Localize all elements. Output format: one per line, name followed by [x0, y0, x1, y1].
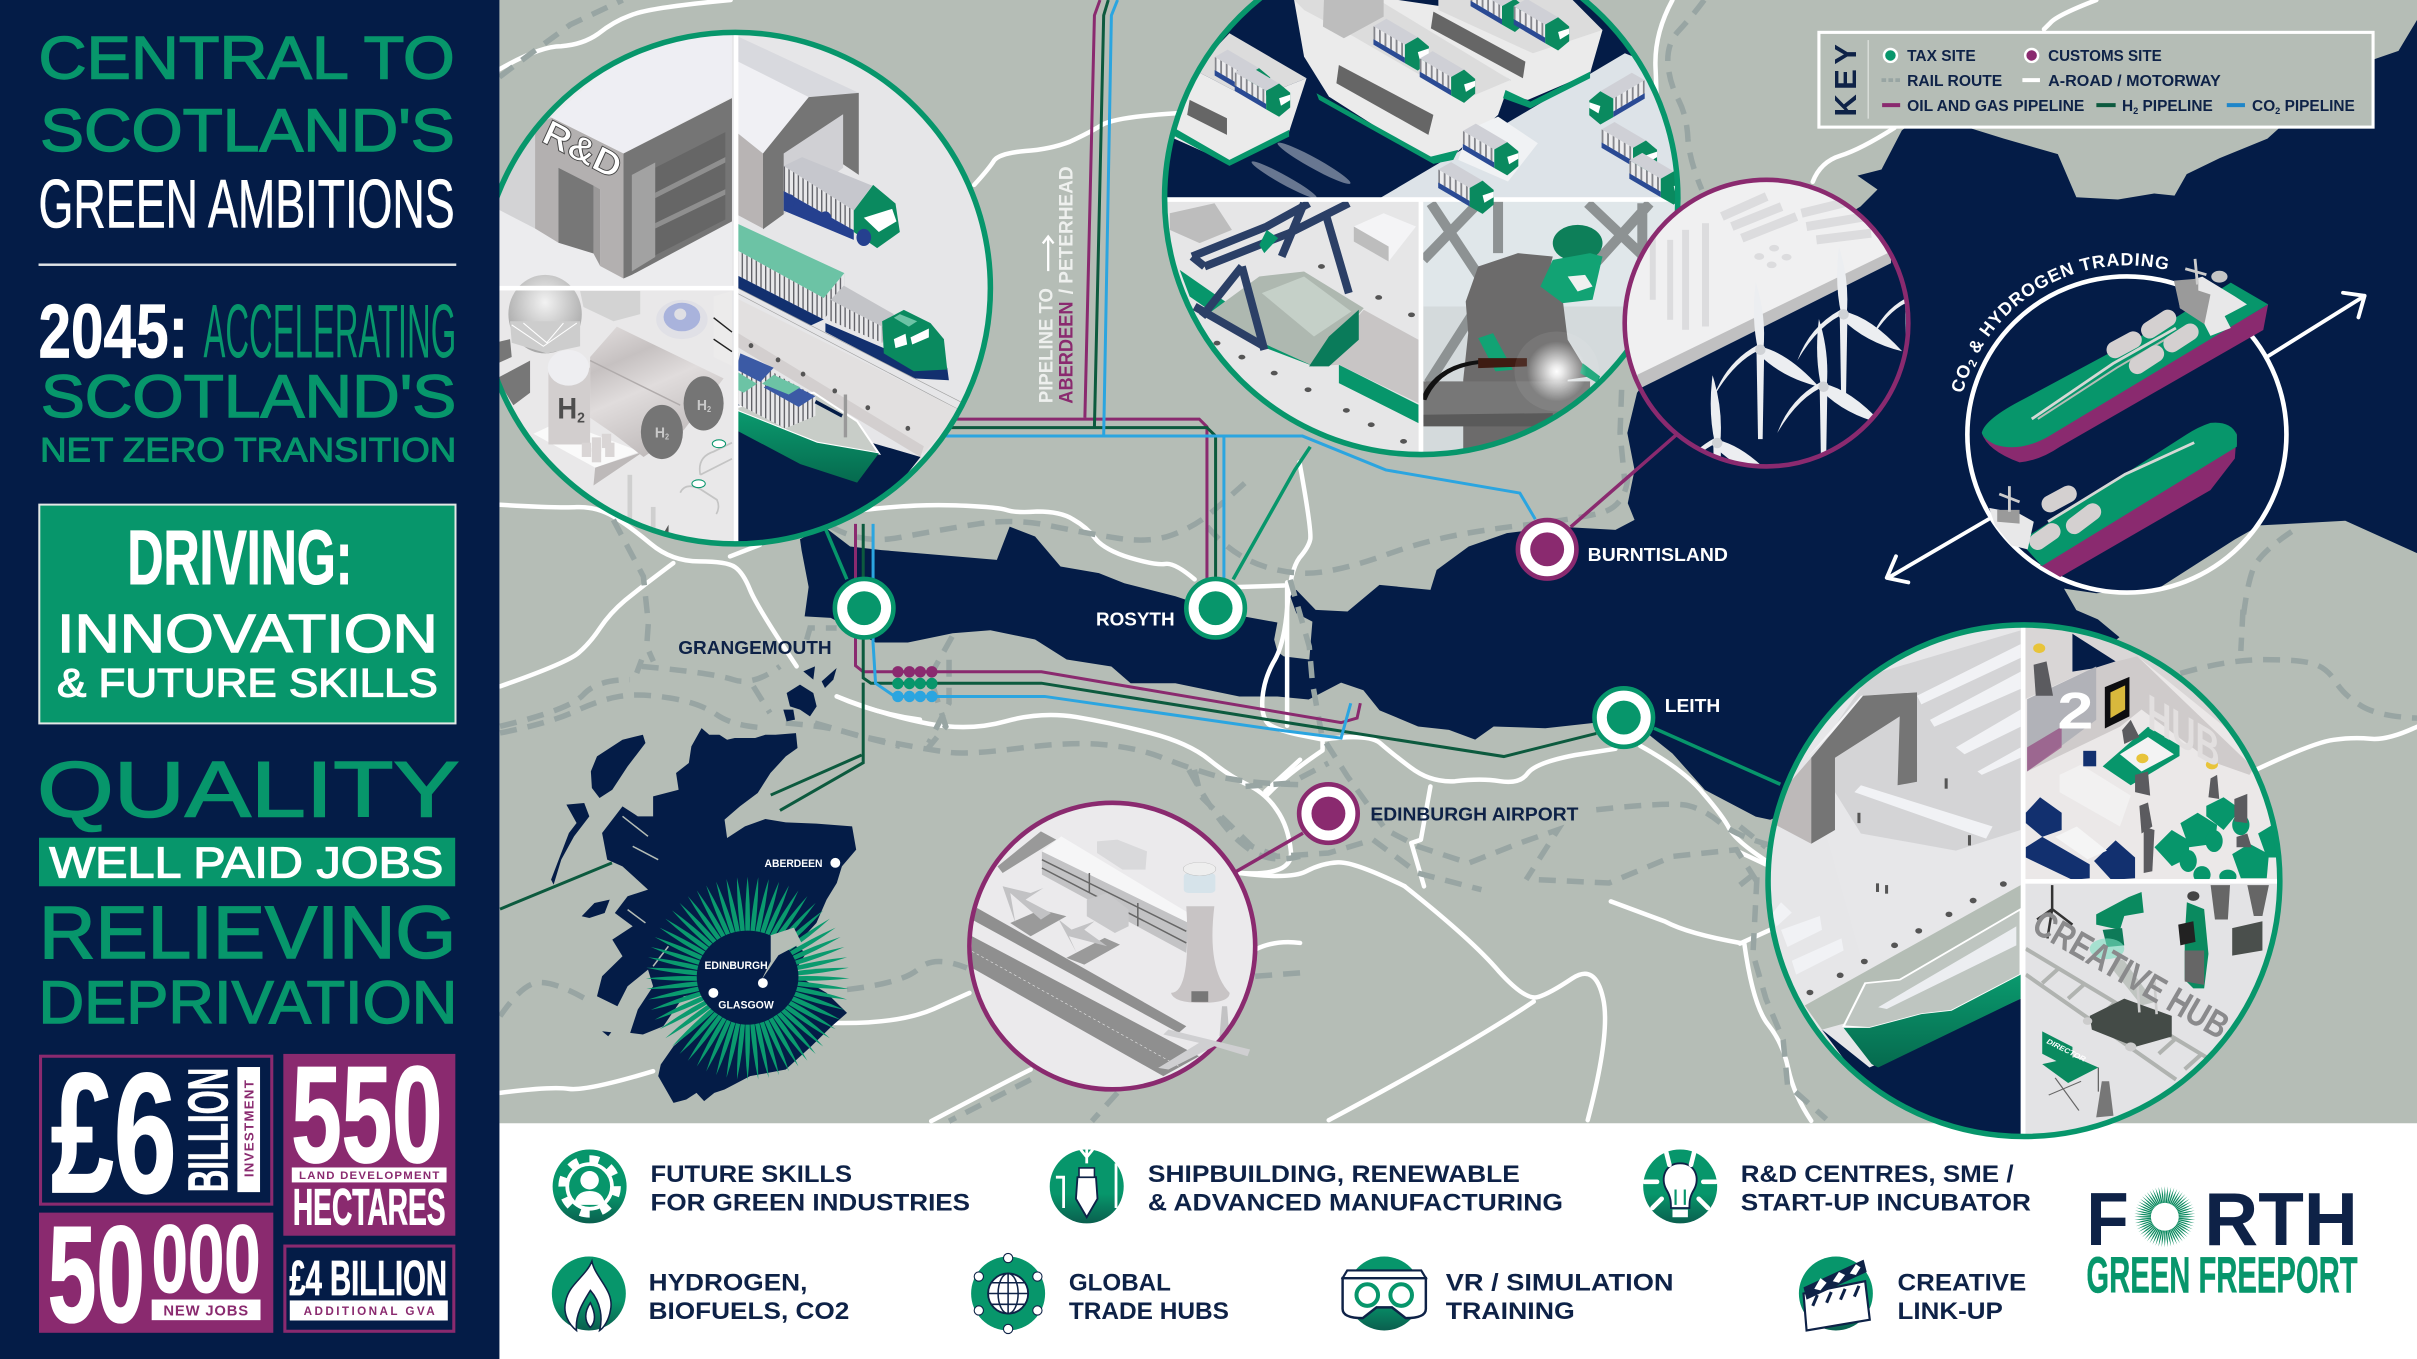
key: PIPELINE: [2138, 98, 2213, 115]
R&D building illustration: R&D: [537, 112, 628, 187]
site labels: ROSYTH: [1096, 609, 1175, 630]
map of Scotland: ABERDEEN: [765, 858, 823, 870]
callout: driving innovation: INNOVATION: [57, 604, 438, 664]
marker: Edinburgh Airport customs site: [1299, 784, 1358, 843]
text: future skills: FUTURE SKILLS: [650, 1162, 852, 1188]
text: global trade hubs: [1069, 1270, 1229, 1325]
stat: 4 billion additional GVA: £4 BILLION: [289, 1251, 447, 1306]
stat: 550 hectares: 550: [291, 1039, 442, 1192]
text: creative link-up: CREATIVE: [1898, 1270, 2026, 1296]
pipeline label: / PETERHEAD: [1057, 166, 1078, 294]
icon: VR headset: [1343, 1257, 1426, 1330]
text: VR simulation: TRAINING: [1446, 1299, 1575, 1325]
stat: 4 billion additional GVA: ADDITIONAL GVA: [304, 1305, 435, 1318]
site markers: [835, 520, 1653, 843]
heading: 2045 net zero: [39, 289, 456, 469]
text: VR simulation: [1446, 1270, 1674, 1325]
heading: quality jobs relieving deprivation: WELL PAID JOBS: [49, 839, 443, 888]
map of Scotland: [551, 666, 857, 1103]
key: KEY: [1828, 44, 1863, 116]
text: creative link-up: LINK-UP: [1898, 1299, 2003, 1325]
heading: quality jobs relieving deprivation: [37, 746, 459, 1036]
key: RAIL ROUTE: [1907, 72, 2002, 90]
hydrogen storage illustration: H: [655, 425, 665, 441]
key: TAX SITE: [1907, 47, 1976, 65]
hydrogen storage illustration: 2: [577, 410, 585, 427]
quay, sea and cargo ship: [738, 333, 957, 542]
callout: driving innovation: DRIVING:: [127, 515, 352, 601]
marker: Rosyth tax site: [1186, 579, 1245, 637]
panel: Rosyth illustrations circle: [1156, 0, 1688, 462]
heading: central to Scotland's green ambitions: SCOTLAND'S: [40, 97, 455, 164]
icon: creative clapperboard: [1799, 1257, 1873, 1330]
key: H: [2122, 98, 2133, 115]
pipeline junction dots: [892, 666, 938, 702]
text: shipbuilding: & ADVANCED MANUFACTURING: [1148, 1190, 1563, 1216]
hydrogen pipeline: [500, 0, 1596, 909]
arrows: [1887, 293, 2365, 582]
SME hub illustration: 2: [2057, 683, 2093, 740]
panel: CO2 and hydrogen trading ships circle: 2: [1968, 360, 1978, 368]
stat: 550 hectares: LAND DEVELOPMENT: [299, 1170, 439, 1182]
callout: driving innovation: & FUTURE SKILLS: [57, 661, 438, 705]
warehouse, truck and train illustration: [738, 37, 961, 542]
heading: central to Scotland's green ambitions: GREEN AMBITIONS: [39, 165, 455, 242]
text: VR simulation: VR / SIMULATION: [1446, 1270, 1674, 1296]
stat: 6 billion investment: INVESTMENT: [241, 1080, 256, 1177]
icon: hydrogen flame: [552, 1257, 626, 1330]
text: shipbuilding: [1148, 1162, 1563, 1216]
panel: CO2 and hydrogen trading ships circle: [1884, 253, 2367, 595]
stat: 6 billion investment: £6: [51, 1038, 177, 1229]
icon: global trade hubs: [971, 1253, 1045, 1334]
SME hub illustration: [2025, 623, 2284, 883]
panel: Grangemouth illustrations circle: [499, 30, 994, 547]
map background land: [499, 0, 2417, 1125]
hydrogen storage illustration: 2: [707, 405, 711, 414]
site labels: GRANGEMOUTH: [678, 637, 832, 658]
truck: [784, 157, 900, 248]
heading: central to Scotland's green ambitions: [39, 25, 455, 242]
icon: future skills: [553, 1149, 627, 1223]
rail routes: [499, 0, 2417, 1121]
text: creative link-up: [1898, 1270, 2026, 1325]
site labels: BURNTISLAND: [1588, 544, 1728, 565]
marker: Grangemouth tax site: [835, 579, 893, 637]
hydrogen storage illustration: [499, 274, 732, 532]
heading: 2045 net zero: 2045:: [39, 289, 188, 374]
R&D building illustration: [500, 36, 732, 278]
stat: 550 hectares: HECTARES: [293, 1178, 445, 1235]
stat: 50000 new jobs: 000: [152, 1206, 261, 1313]
turbine blade factory and ship: [1766, 623, 2021, 1140]
creative hub illustration: [2026, 885, 2269, 1118]
text: hydrogen: [649, 1270, 849, 1325]
callout: driving innovation: [39, 505, 455, 723]
ship 2: [1989, 423, 2237, 577]
site labels: EDINBURGH AIRPORT: [1370, 803, 1579, 824]
site labels: [678, 544, 1728, 824]
left navy panel: [0, 0, 499, 1359]
trucks on ferries and quay: [1215, 0, 1685, 214]
sea: Firth of Forth and North Sea: [800, 20, 2417, 820]
shipyard crane illustration: [1165, 201, 1418, 461]
creative hub illustration: DIRECTOR: [2045, 1037, 2088, 1063]
key: A-ROAD / MOTORWAY: [2048, 72, 2221, 90]
panel: CO2 and hydrogen trading ships circle: CO: [1952, 365, 1970, 392]
heading: quality jobs relieving deprivation: QUALITY: [37, 746, 459, 834]
stat: 6 billion investment: BILLION: [176, 1068, 240, 1192]
carbon dioxide pipeline: [873, 0, 1535, 738]
text: future skills: [650, 1162, 970, 1216]
pipeline label: PIPELINE TO: [1037, 288, 1058, 403]
key: PIPELINE: [2280, 98, 2355, 115]
text: R&D centres: START-UP INCUBATOR: [1741, 1190, 2031, 1216]
road network: [499, 0, 2417, 1121]
stat: 4 billion additional GVA: [285, 1246, 454, 1331]
text: global trade hubs: TRADE HUBS: [1069, 1299, 1229, 1325]
text: R&D centres: [1741, 1162, 2031, 1216]
bottom feature strip: [552, 1149, 2358, 1334]
ship 1: [1982, 259, 2268, 462]
text: shipbuilding: SHIPBUILDING, RENEWABLE: [1148, 1162, 1520, 1188]
text: hydrogen: BIOFUELS, CO2: [649, 1299, 849, 1325]
stat: 50000 new jobs: 50: [48, 1199, 145, 1352]
hydrogen storage illustration: 2: [665, 432, 669, 442]
heading: 2045 net zero: NET ZERO TRANSITION: [40, 431, 456, 469]
key: OIL AND GAS PIPELINE: [1907, 97, 2085, 115]
key: CUSTOMS SITE: [2048, 47, 2162, 65]
bottom strip background: [499, 1123, 2417, 1359]
logo: Forth Green Freeport: [2086, 1177, 2358, 1304]
connector lines to sites: [825, 431, 1780, 871]
panel: Edinburgh Airport circle: [963, 794, 1264, 1099]
pipeline label: ABERDEEN: [1057, 302, 1078, 404]
panel: CO2 and hydrogen trading ships circle: & HYDROGEN TRADING: [1970, 253, 2168, 353]
text: hydrogen: HYDROGEN,: [649, 1270, 807, 1296]
icon: R&D bulb: [1643, 1149, 1717, 1223]
heading: quality jobs relieving deprivation: RELIEVING: [39, 891, 456, 974]
heading: quality jobs relieving deprivation: DEPRIVATION: [39, 969, 457, 1036]
wind turbines: [1700, 274, 1906, 464]
stat: 50000 new jobs: [39, 1199, 273, 1352]
icon: shipbuilding: [1050, 1149, 1124, 1223]
ferry wakes: [1252, 142, 1350, 198]
sunburst on Scotland: [638, 869, 857, 1088]
logo: Forth Green Freeport: RTH: [2204, 1177, 2358, 1261]
text: global trade hubs: GLOBAL: [1069, 1270, 1171, 1296]
hydrogen storage illustration: H: [697, 397, 707, 414]
key: 2: [2275, 106, 2280, 116]
curved label: [1963, 265, 2212, 394]
text: future skills: FOR GREEN INDUSTRIES: [650, 1190, 970, 1216]
train: [736, 223, 971, 411]
pipeline label: [1037, 166, 1078, 404]
key: [1819, 32, 2373, 127]
aeroplanes: [1003, 886, 1230, 1040]
welder illustration: [1423, 202, 1654, 452]
pipelines: [500, 0, 1596, 909]
creative hub floor lettering: CREATIVE HUB: [2026, 902, 2236, 1047]
hydrogen storage illustration: H: [557, 393, 577, 426]
ferries at port: [1167, 0, 1632, 198]
text: R&D centres: R&D CENTRES, SME /: [1741, 1162, 2014, 1188]
map of Scotland: GLASGOW: [718, 1000, 775, 1012]
text: ACCELERATING: [203, 289, 456, 374]
site labels: LEITH: [1665, 695, 1720, 716]
heading: 2045 net zero: SCOTLAND'S: [41, 363, 456, 430]
panel: Leith illustrations circle: [1757, 616, 2289, 1148]
marker: Burntisland customs site: [1518, 520, 1576, 579]
SME hub wall lettering: HUB: [2147, 684, 2220, 780]
logo: Forth Green Freeport: F: [2086, 1177, 2129, 1261]
heading: central to Scotland's green ambitions: CENTRAL TO: [39, 25, 455, 92]
map of Scotland: EDINBURGH: [704, 960, 768, 972]
stat: 50000 new jobs: NEW JOBS: [163, 1304, 248, 1320]
key: 2: [2133, 106, 2138, 116]
stat: 550 hectares: [283, 1039, 455, 1236]
key: CO: [2252, 98, 2275, 115]
panel: Burntisland wind turbines circle: [1622, 178, 1911, 469]
marker: Leith tax site: [1594, 688, 1653, 747]
oil and gas pipeline: [856, 0, 1360, 723]
